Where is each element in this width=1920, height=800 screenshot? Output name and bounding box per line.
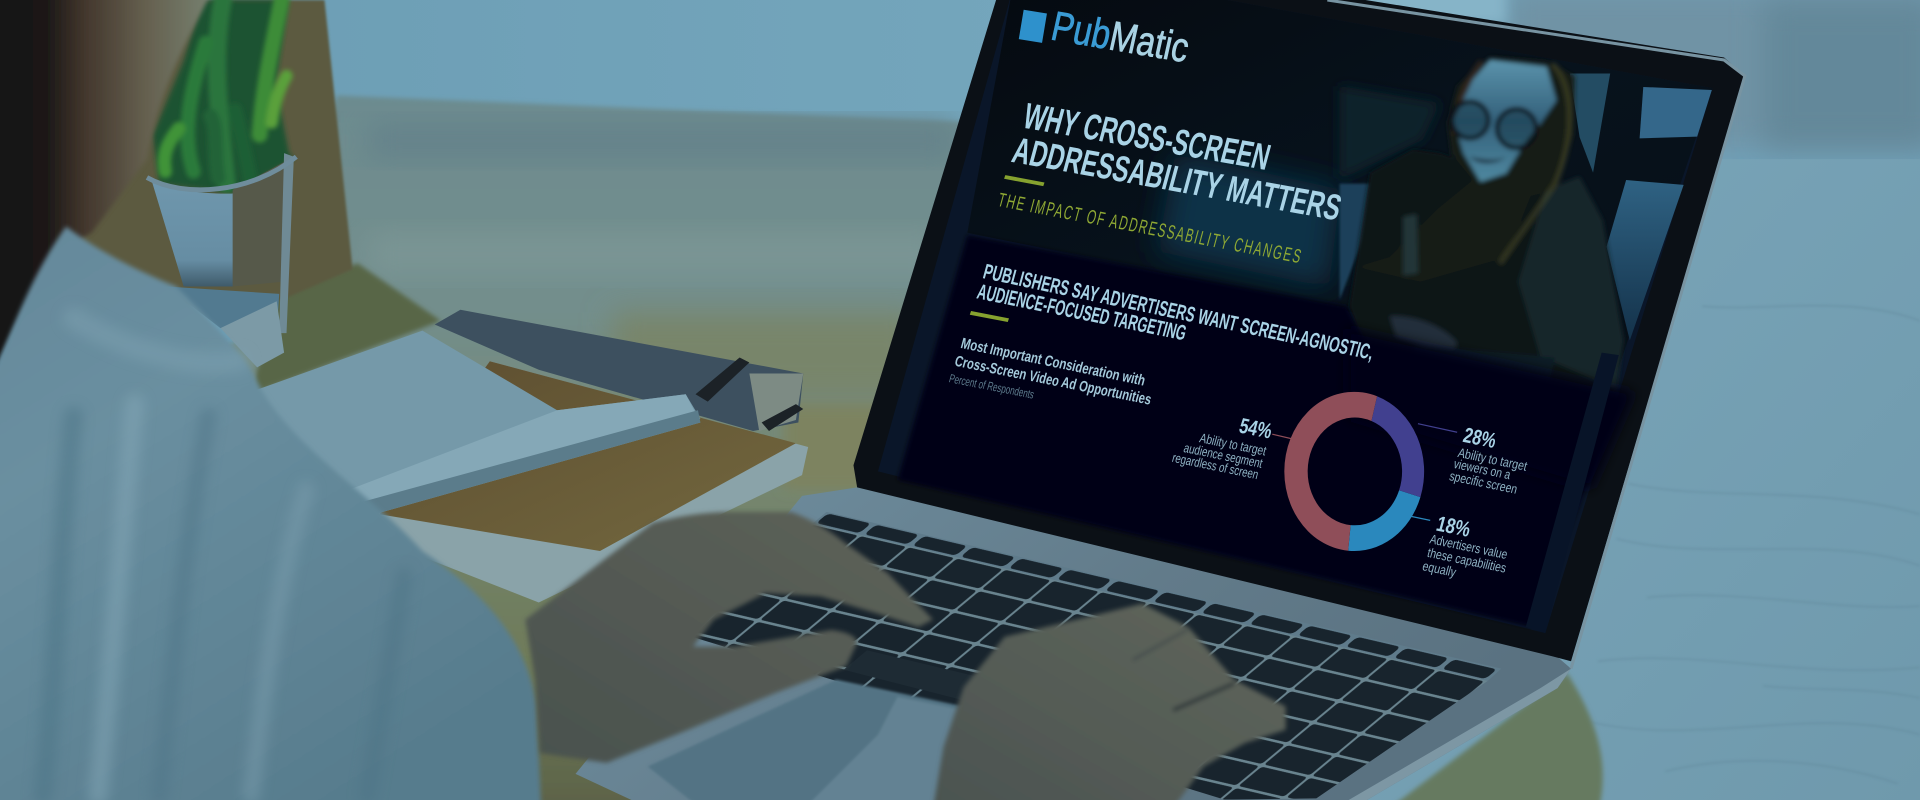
callout: 18%: Advertisers value — [1428, 532, 1509, 562]
callout: 54%: Ability to target — [1198, 430, 1268, 459]
title — [1008, 95, 1346, 228]
table: right side pale wood — [1347, 159, 1920, 800]
section heading — [975, 259, 1376, 365]
small white box — [167, 287, 284, 367]
cardboard bag behind plant — [73, 0, 353, 367]
title: ADDRESSABILITY MATTERS — [1008, 129, 1346, 228]
grey notebook — [435, 310, 803, 431]
callout: 54%: 54% — [1237, 414, 1275, 443]
title: WHY CROSS-SCREEN — [1019, 95, 1275, 178]
laptop lid — [853, 0, 1745, 669]
sweater shoulder — [1518, 176, 1624, 389]
callout: 28%: specific screen — [1448, 468, 1519, 497]
callout: 18%: 18% — [1434, 512, 1473, 542]
hair — [0, 0, 211, 373]
subtitle: THE IMPACT OF ADDRESSABILITY CHANGES — [995, 189, 1305, 268]
glasses — [1452, 102, 1536, 148]
callout: 28%: viewers on a — [1452, 456, 1513, 482]
face — [1453, 60, 1556, 182]
logo: PubMatic: PubMatic — [1047, 3, 1193, 71]
callout: 18%: these capabilities — [1426, 545, 1508, 576]
laptop screen — [878, 0, 1713, 633]
table: back wood, blurred — [184, 96, 980, 800]
callout: 28%: 28% — [1461, 423, 1499, 453]
screen lower panel — [898, 235, 1619, 627]
brown notebook — [373, 361, 808, 602]
chart note: Percent of Respondents — [948, 371, 1036, 402]
callout: 54% — [1171, 414, 1296, 482]
screen photo: window light — [1340, 73, 1712, 340]
title accent bar — [1004, 175, 1044, 186]
callout: 28% — [1418, 423, 1529, 497]
screen photo: woman — [1349, 56, 1624, 392]
left hand — [525, 512, 933, 763]
shirt — [0, 227, 541, 800]
callout: 54%: regardless of screen — [1171, 450, 1260, 482]
screen upper: dark gradient — [967, 0, 1713, 367]
chart title: Most Important Consideration with — [959, 335, 1147, 389]
callout: 28%: Ability to target — [1456, 445, 1529, 474]
open notebook pages — [251, 331, 700, 520]
donut chart — [1284, 392, 1424, 551]
chart title: Cross-Screen Video Ad Opportunities — [953, 353, 1153, 409]
section heading: PUBLISHERS SAY ADVERTISERS WANT SCREEN-AGNOSTIC, — [981, 259, 1376, 365]
laptop base — [576, 487, 1571, 800]
callout: 54%: audience segment — [1182, 440, 1265, 471]
callout: 18%: equally — [1421, 558, 1458, 580]
torso — [1349, 149, 1624, 392]
plant — [153, 0, 294, 193]
right hand — [933, 604, 1286, 800]
keyboard — [696, 512, 1501, 800]
trackpad — [648, 680, 964, 800]
section heading: AUDIENCE-FOCUSED TARGETING — [975, 280, 1189, 345]
callout: 18% — [1407, 512, 1509, 580]
metal pot — [147, 153, 296, 333]
hair — [1357, 56, 1575, 282]
section accent bar — [970, 311, 1009, 322]
